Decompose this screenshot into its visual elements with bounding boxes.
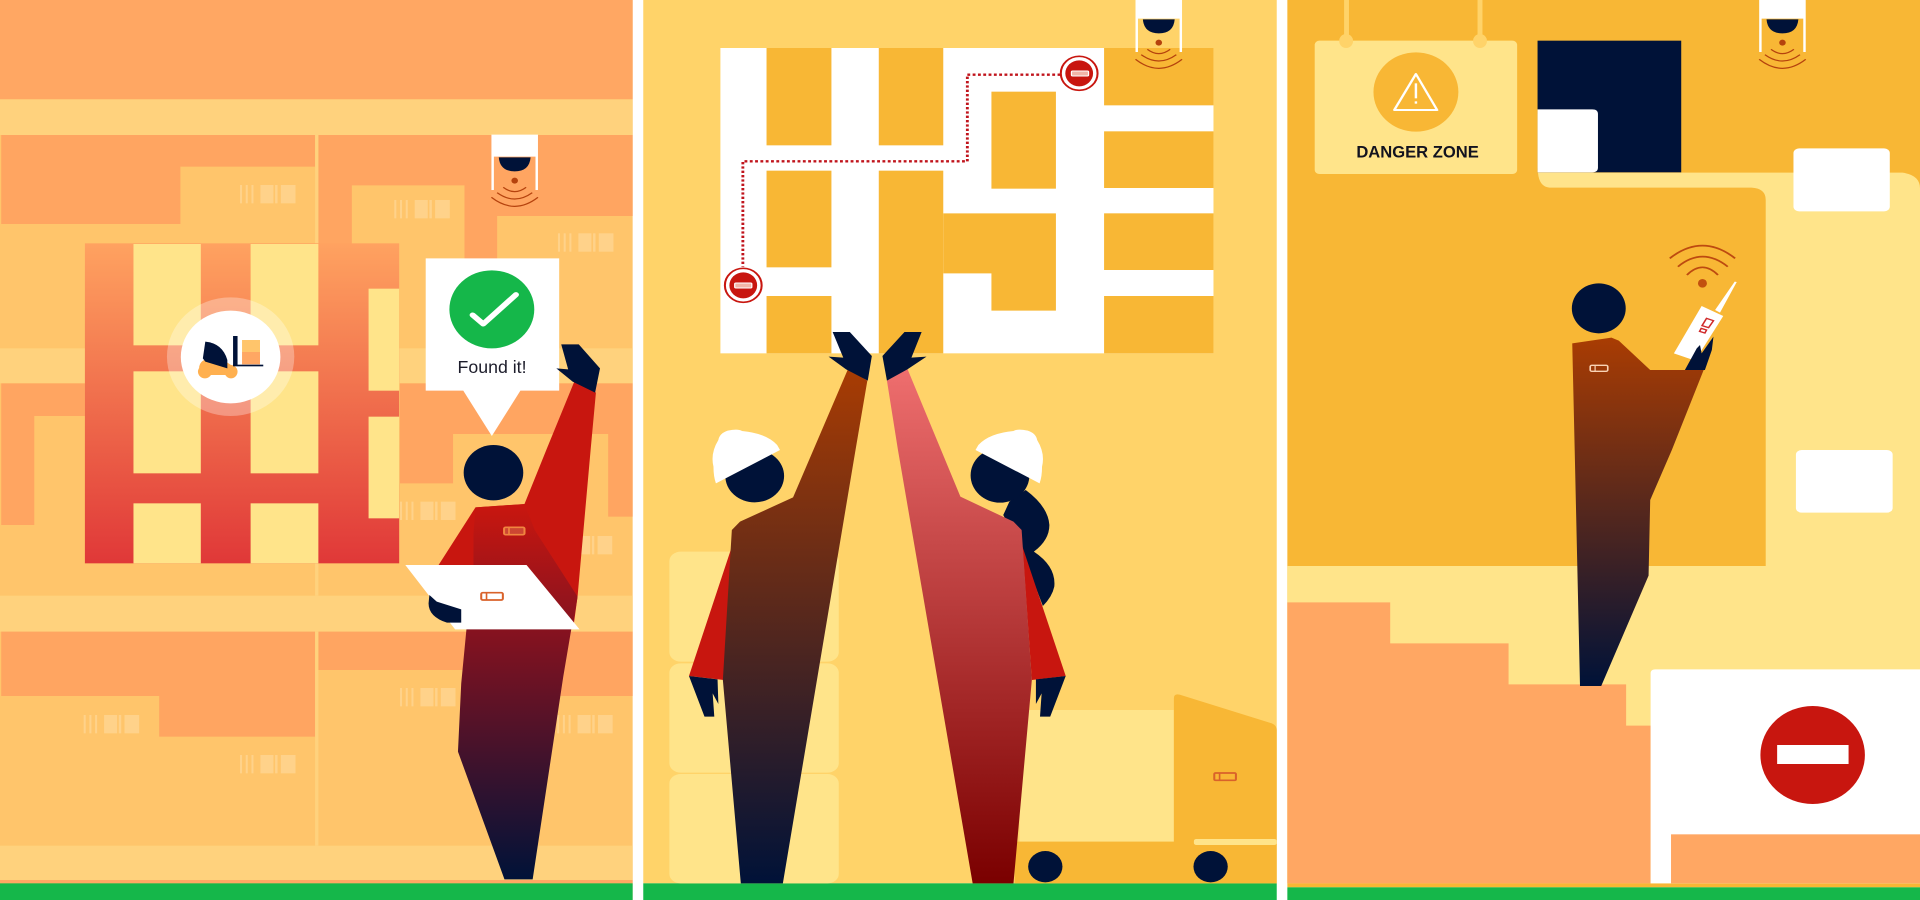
stacked shelves <box>669 552 839 883</box>
route map <box>85 243 399 563</box>
sign label: DANGER ZONE <box>1356 142 1479 161</box>
delivery truck <box>1015 694 1277 883</box>
callout: found it: Found it! <box>458 358 527 377</box>
ground strip <box>643 883 1277 900</box>
white cards <box>1793 148 1893 513</box>
ground strip <box>0 883 633 900</box>
panel: danger zone <box>1287 0 1920 900</box>
doorway <box>1538 41 1681 172</box>
worker with scanner <box>1572 282 1737 686</box>
dotted route <box>743 75 1060 267</box>
worker with tablet <box>405 344 600 879</box>
stairs <box>1287 602 1651 883</box>
marker: destination <box>1061 56 1098 90</box>
icon: warning triangle <box>1373 52 1458 132</box>
marker: start <box>725 268 762 302</box>
icon: ceiling sensor <box>491 135 538 206</box>
worker: right <box>882 332 1066 883</box>
icon: ceiling sensor <box>1759 0 1806 68</box>
barcodes <box>84 185 613 773</box>
warehouse floor map <box>720 48 1213 353</box>
icon: wifi signal <box>1670 246 1735 288</box>
no entry panel <box>1651 669 1920 883</box>
hanging sign <box>1315 0 1517 174</box>
scanner <box>1674 282 1737 361</box>
icon: no entry <box>1760 706 1865 804</box>
panel: found it <box>0 0 633 900</box>
icon: forklift marker <box>167 297 294 416</box>
floor area <box>1287 173 1920 883</box>
panel: route map and high five <box>643 0 1277 900</box>
worker: left <box>689 332 872 883</box>
ground strip <box>1287 887 1920 900</box>
icon: ceiling sensor <box>1136 0 1182 68</box>
callout: found it <box>426 258 559 436</box>
